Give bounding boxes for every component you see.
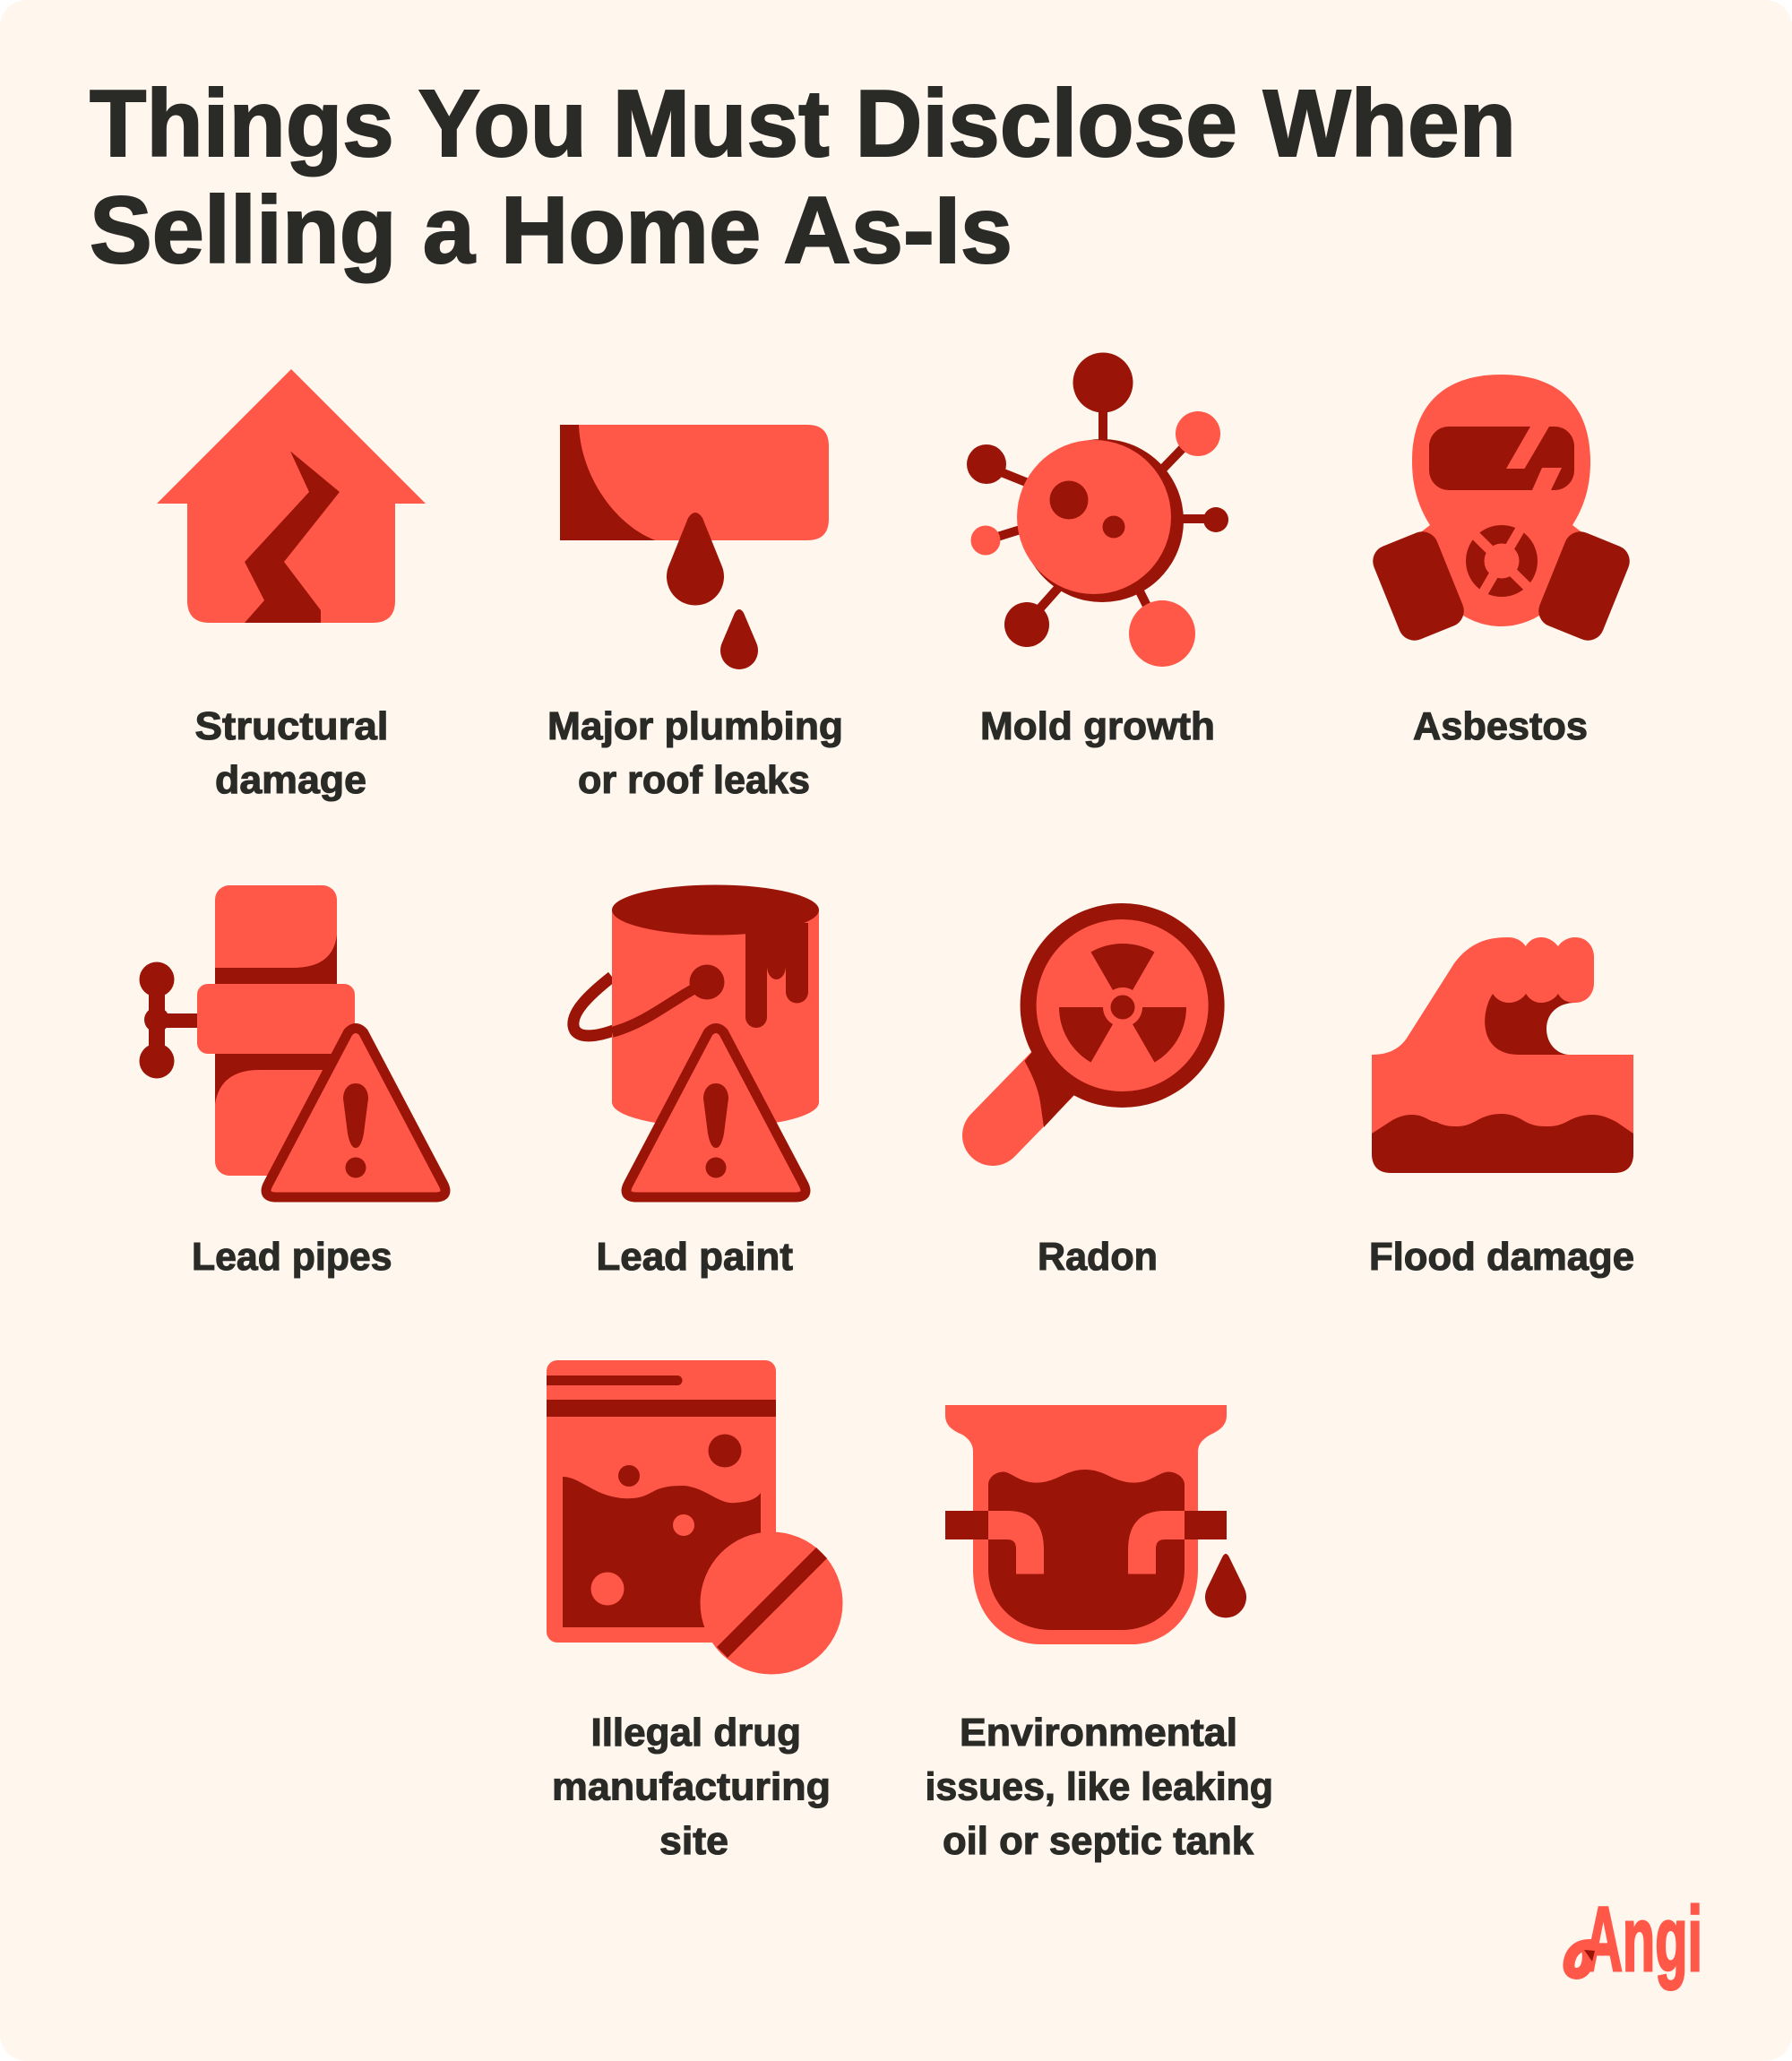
title: Things You Must Disclose When <box>90 71 1516 177</box>
icon: pill <box>701 1532 842 1674</box>
item: flood damage <box>1369 937 1634 1279</box>
label: asbestos: Asbestos <box>1413 704 1588 748</box>
icon: wave and flood <box>1372 937 1633 1173</box>
icon: warning triangle <box>266 1029 445 1197</box>
item: lead pipes <box>140 885 445 1279</box>
label: structural damage: Structural <box>195 704 389 748</box>
label: illegal drug manufacturing site: manufacturing <box>552 1765 831 1808</box>
label: environmental issues, like leaking oil or septic tank: Environmental <box>960 1711 1237 1755</box>
item: environmental issues <box>925 1405 1273 1863</box>
logo: Angi <box>1569 1888 1702 1990</box>
label: environmental issues, like leaking oil or septic tank: issues, like leaking <box>925 1765 1273 1808</box>
label: structural damage <box>195 704 389 802</box>
label: structural damage: damage <box>215 758 366 802</box>
icon: warning triangle <box>626 1029 806 1197</box>
title <box>90 71 1516 283</box>
label: lead pipes: Lead pipes <box>192 1235 392 1279</box>
label: mold growth: Mold growth <box>980 704 1215 748</box>
label: illegal drug manufacturing site: site <box>659 1819 728 1863</box>
icon: paint can with warning <box>573 885 819 1197</box>
item: illegal drug manufacturing site <box>547 1360 842 1863</box>
item: major plumbing or roof leaks <box>547 425 843 802</box>
label: environmental issues, like leaking oil or septic tank <box>925 1711 1273 1863</box>
label: illegal drug manufacturing site <box>552 1711 831 1863</box>
icon: lead pipe with warning <box>140 885 445 1197</box>
item: mold growth <box>967 353 1228 748</box>
label: lead paint: Lead paint <box>597 1235 793 1279</box>
label: major plumbing or roof leaks: or roof leaks <box>578 758 810 802</box>
icon: cracked house <box>157 369 426 623</box>
label: flood damage: Flood damage <box>1369 1235 1634 1279</box>
label: radon: Radon <box>1038 1235 1158 1279</box>
item: asbestos <box>1368 375 1634 748</box>
label: illegal drug manufacturing site: Illegal drug <box>591 1711 801 1755</box>
label: environmental issues, like leaking oil or septic tank: oil or septic tank <box>943 1819 1254 1863</box>
icon: magnifier with radiation symbol <box>993 903 1225 1135</box>
item: radon <box>993 903 1225 1279</box>
title: Selling a Home As-Is <box>90 177 1012 283</box>
item: structural damage <box>157 369 426 802</box>
label: major plumbing or roof leaks <box>547 704 843 802</box>
logo: Angi: Angi <box>1584 1888 1702 1990</box>
icon: septic tank with leak <box>945 1405 1246 1644</box>
label: major plumbing or roof leaks: Major plumbing <box>547 704 843 748</box>
icon: drug bag and pill <box>547 1360 842 1674</box>
icon: mold spore <box>967 353 1228 667</box>
item: lead paint <box>573 885 819 1279</box>
icon: leaking pipe with drops <box>560 425 829 669</box>
icon: gas mask <box>1368 375 1634 645</box>
